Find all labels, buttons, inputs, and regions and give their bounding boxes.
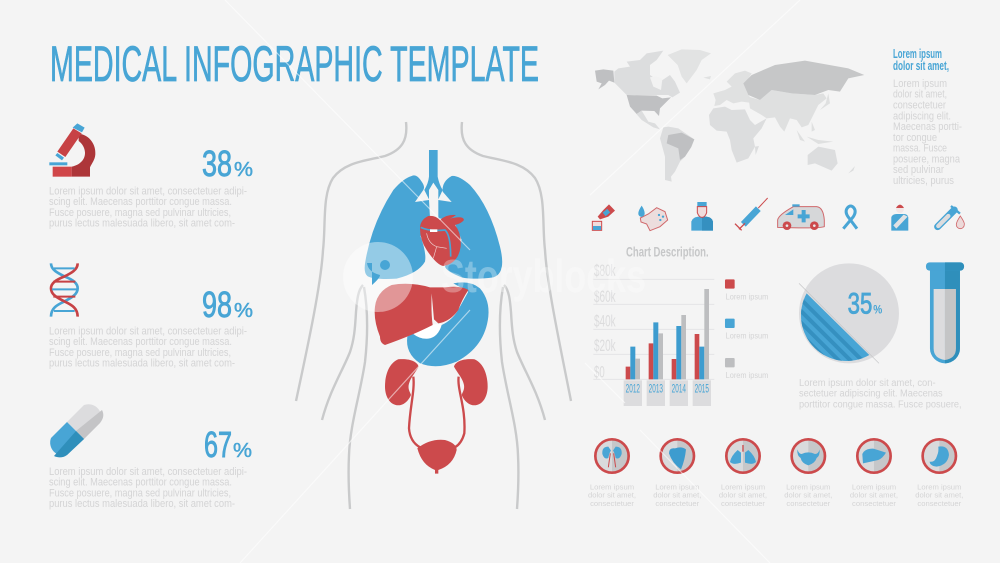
badge captions: consectetuer (590, 499, 634, 508)
badge captions: consectetuer (917, 499, 962, 508)
badge captions: dolor sit amet, (915, 491, 963, 500)
year labels: 2014 (672, 382, 686, 396)
text block (49, 466, 247, 510)
icon: test tube with drop (938, 206, 964, 229)
year labels: 2012 (626, 382, 640, 396)
badge captions: dolor sit amet, (719, 491, 767, 500)
axis labels: $80k (594, 261, 616, 280)
text block: purus lectus malesuada libero, sit amet com- (49, 498, 235, 510)
map note heading (893, 46, 949, 73)
text block: purus lectus malesuada libero, sit amet com- (49, 358, 235, 370)
badge captions: dolor sit amet, (653, 491, 701, 500)
badge: kidneys (595, 439, 629, 473)
text block: purus lectus malesuada libero, sit amet com- (49, 218, 235, 230)
body outline (296, 122, 571, 509)
badge captions: Lorem ipsum (590, 482, 634, 491)
percent sign: % (234, 300, 253, 322)
badge captions: Lorem ipsum (786, 482, 830, 491)
map note text: posuere, magna (893, 153, 961, 165)
ureters (409, 377, 465, 447)
legend: Lorem ipsum (726, 292, 769, 301)
stomach (407, 282, 489, 366)
badge captions: Lorem ipsum (655, 482, 699, 491)
icon: pill capsule (50, 404, 103, 457)
icon: ambulance (778, 204, 824, 230)
legend: Lorem ipsum (726, 332, 769, 341)
panel: statistic 38 percent (49, 123, 253, 230)
percent sign: % (233, 440, 252, 462)
year labels (624, 380, 711, 406)
watermark (225, 0, 800, 563)
badge: bladder (792, 439, 825, 473)
Russia (743, 61, 864, 100)
icon: microscope (49, 123, 95, 177)
percentage value: 38 (202, 143, 232, 184)
map side note (893, 46, 962, 187)
text block (49, 186, 247, 230)
text block: Lorem ipsum dolor sit amet, consectetuer adipi- (49, 186, 247, 198)
map note heading: Lorem ipsum (893, 46, 942, 61)
badge: heart (661, 439, 694, 473)
percentage value: 98 (202, 284, 232, 325)
map note text: ultricies, purus (893, 175, 954, 187)
text block: Fusce posuere, magna sed pulvinar ultricies, (49, 488, 231, 500)
pie description: porttitor congue massa. Fusce posuere, (799, 399, 962, 410)
badge captions: dolor sit amet, (784, 491, 832, 500)
world map (595, 49, 864, 182)
icon: syringe (735, 198, 768, 230)
axis labels (594, 261, 616, 381)
pie value: 35 (848, 287, 872, 320)
badge captions: consectetuer (786, 499, 831, 508)
stomach inner highlight (413, 324, 442, 339)
map note text: adipiscing elit. (893, 110, 951, 122)
Africa (709, 107, 767, 163)
badge captions: dolor sit amet, (850, 491, 898, 500)
badge: lungs (726, 439, 760, 473)
text block: Fusce posuere, magna sed pulvinar ultricies, (49, 207, 231, 219)
Europe (703, 71, 755, 106)
watermark: Storyblocks (441, 250, 646, 302)
axis labels: $60k (594, 287, 616, 306)
icon: hand with drop (638, 206, 668, 231)
map note text: Maecenas portti- (893, 121, 962, 133)
percent sign: % (234, 159, 253, 181)
North America (595, 49, 711, 129)
legend (725, 279, 769, 380)
bladder (417, 440, 457, 474)
map note text (893, 78, 962, 187)
pie percent sign: % (873, 302, 883, 316)
Asia (748, 90, 833, 144)
test tube (926, 262, 964, 363)
icon: doctor (691, 202, 713, 231)
badge: liver (857, 439, 891, 473)
text block: Lorem ipsum dolor sit amet, consectetuer adipi- (49, 326, 247, 338)
map note text: Lorem ipsum (893, 78, 947, 90)
icon: awareness ribbon (843, 206, 857, 229)
text block: scing elit. Maecenas porttitor congue massa. (49, 196, 232, 208)
percentage value: 67 (204, 424, 232, 465)
text block: scing elit. Maecenas porttitor congue massa. (49, 476, 232, 488)
bar chart panel (593, 244, 769, 406)
pie description: sectetuer adipiscing elit. Maecenas (799, 389, 943, 400)
axis labels: $0 (594, 362, 605, 381)
badge captions: Lorem ipsum (917, 482, 961, 491)
organ badges row (588, 439, 963, 508)
left kidney (385, 359, 419, 405)
South America (660, 127, 694, 182)
badge captions: consectetuer (721, 499, 765, 508)
map note text: massa. Fusce (893, 143, 947, 155)
pie chart panel (798, 262, 964, 410)
right kidney (454, 359, 488, 405)
title: MEDICAL INFOGRAPHIC TEMPLATE (50, 36, 539, 92)
left lung (365, 175, 430, 279)
text block: scing elit. Maecenas porttitor congue massa. (49, 336, 232, 348)
text block (49, 326, 247, 370)
bars (626, 289, 709, 379)
badge: stomach (923, 439, 956, 473)
map note text: tor congue (893, 132, 937, 144)
icon: medicine bottle and cup (592, 204, 615, 230)
year labels: 2013 (649, 382, 663, 396)
badge captions: consectetuer (852, 499, 896, 508)
panel: statistic 67 percent (49, 404, 252, 510)
badge captions: consectetuer (655, 499, 700, 508)
icon: patient with sling (891, 205, 908, 231)
badge captions: Lorem ipsum (721, 482, 765, 491)
icon: DNA helix (51, 263, 78, 317)
badge captions: Lorem ipsum (852, 482, 896, 491)
trachea (424, 150, 443, 199)
anatomy organs (365, 150, 502, 474)
Australia (808, 147, 855, 173)
legend: Lorem ipsum (726, 371, 769, 380)
liver (375, 284, 468, 345)
pie chart (798, 263, 899, 368)
pie description (799, 378, 962, 410)
map note text: dolor sit amet, (893, 89, 947, 101)
text block: Lorem ipsum dolor sit amet, consectetuer adipi- (49, 466, 247, 478)
map note heading: dolor sit amet, (893, 58, 949, 73)
pie description: Lorem ipsum dolor sit amet, con- (799, 378, 936, 389)
panel: statistic 98 percent (49, 263, 253, 370)
badge captions: dolor sit amet, (588, 491, 636, 500)
axis labels: $40k (594, 312, 616, 331)
badge captions (588, 482, 963, 508)
heart (420, 215, 464, 266)
map note text: sed pulvinar (893, 164, 944, 176)
year labels: 2015 (695, 382, 709, 396)
right lung (438, 176, 502, 279)
map note text: consectetuer (893, 100, 946, 112)
chart heading: Chart Description. (626, 244, 709, 260)
axis labels: $20k (594, 336, 616, 355)
text block: Fusce posuere, magna sed pulvinar ultricies, (49, 347, 231, 359)
medical icon row (592, 198, 964, 231)
